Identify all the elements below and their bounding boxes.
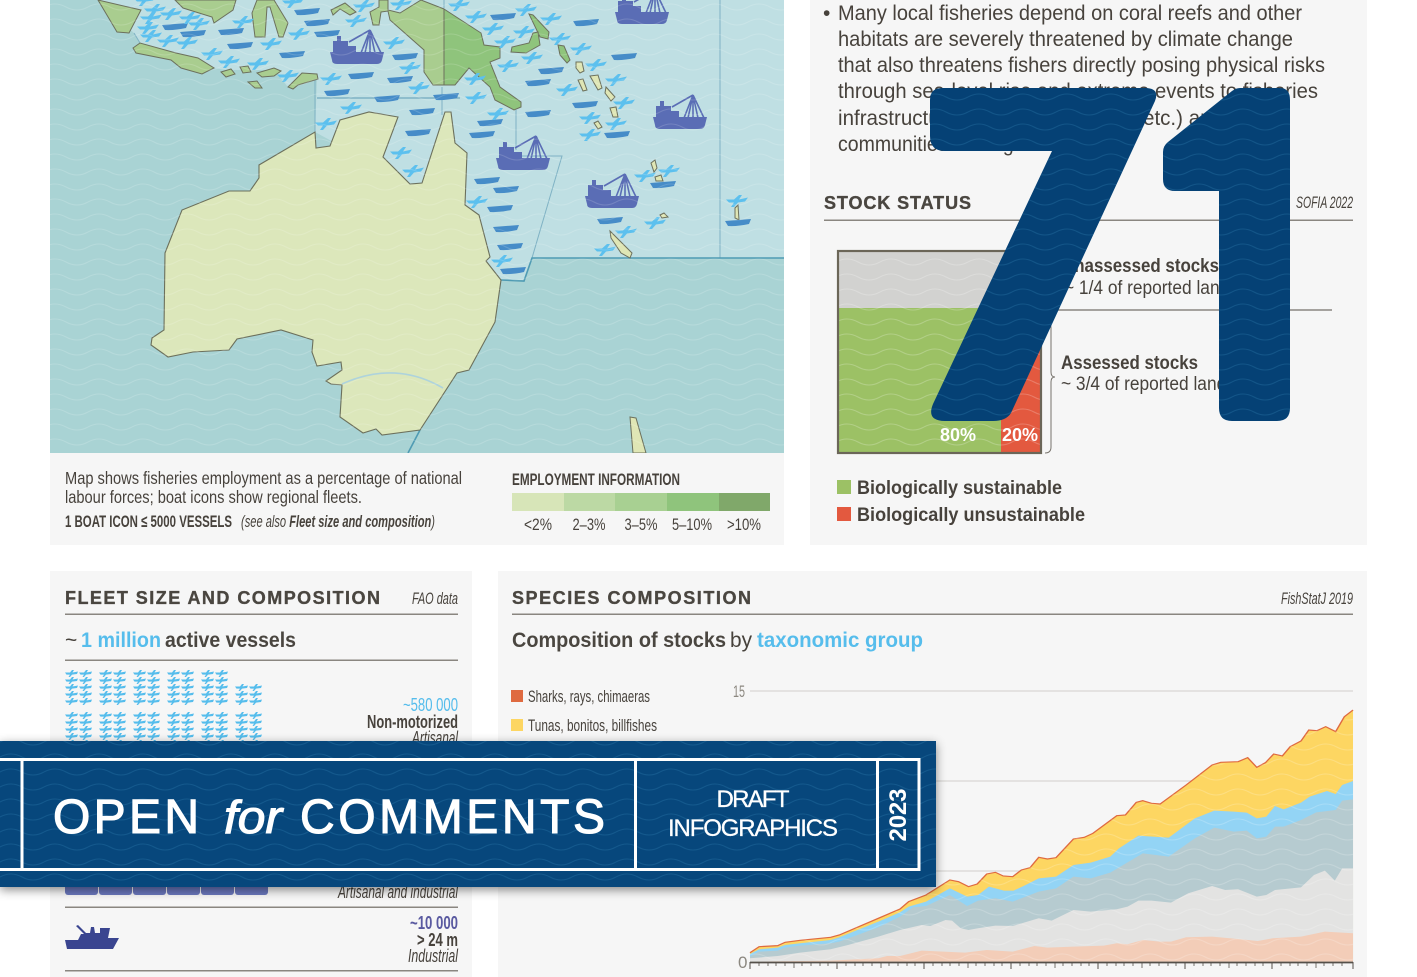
artisanal and industrial label: Artisanal and industrial (337, 882, 459, 902)
bullet text: that also threatens fishers directly posing physical risks (838, 54, 1325, 77)
stock labels: Unassessed stocks (1062, 256, 1219, 277)
subheading: composition: Composition of stocks (512, 629, 726, 652)
employment legend: 2–3% (572, 515, 606, 534)
banner title: for (224, 791, 284, 843)
caption text: Map shows fisheries employment as a percentage of national (65, 468, 462, 488)
stock legend: Biologically sustainable (857, 478, 1062, 499)
y axis labels: 15 (733, 682, 745, 701)
bullet text: • (823, 2, 830, 25)
non-motorized label: ~580 000 (403, 695, 458, 715)
employment legend (512, 470, 770, 534)
species legend (511, 687, 657, 735)
panel: fleet size and composition (50, 571, 472, 977)
EEZ light zone (98, 0, 784, 281)
large fleet icons (330, 0, 707, 208)
bullet text: infrastructure (harbours, vessels, etc.) and (838, 107, 1223, 130)
heading: species (512, 588, 1353, 615)
heading: fleet: FLEET SIZE AND COMPOSITION (65, 588, 380, 608)
subheading: active vessels: ~ (65, 629, 77, 652)
bullet text: through sea-level rise and extreme events to fisheries (838, 80, 1318, 103)
Papua New Guinea and Solomon Islands (444, 9, 570, 110)
x axis labels (727, 975, 1359, 977)
heading: fleet (65, 588, 458, 615)
subheading: active vessels (65, 629, 458, 661)
stock status bar: 80% (940, 425, 976, 445)
non-motorized vessel icons (65, 670, 262, 747)
stacked areas (750, 710, 1353, 962)
banner: open for comments (0, 741, 936, 887)
banner label: draft infographics: INFOGRAPHICS (668, 815, 840, 842)
species legend: Tunas, bonitos, billfishes (528, 716, 657, 735)
area chart (727, 691, 1359, 977)
banner label: draft infographics (668, 786, 840, 842)
big number: 71 (930, 88, 1290, 421)
map wave texture (50, 0, 784, 453)
species legend: Sharks, rays, chimaeras (528, 687, 650, 706)
employment legend: 5–10% (672, 515, 712, 534)
caption text: labour forces; boat icons show regional fleets. (65, 487, 362, 507)
stock labels: ~ 3/4 of reported landings (1061, 374, 1258, 395)
panel: map caption (50, 453, 784, 545)
employment legend: >10% (727, 515, 761, 534)
non-motorized label (367, 695, 459, 748)
heading: species: FishStatJ 2019 (1281, 589, 1353, 608)
stock labels: Assessed stocks (1061, 353, 1198, 374)
employment legend: <2% (524, 515, 552, 534)
employment legend: 3–5% (624, 515, 658, 534)
stock labels: ~ 1/4 of reported landings (1064, 278, 1261, 299)
divider and ship row: > 24 m (417, 930, 458, 950)
heading: stock status: STOCK STATUS (824, 193, 971, 213)
grid lines (750, 691, 1353, 871)
stock status bar: 20% (1002, 425, 1038, 445)
icon: industrial ship (65, 925, 119, 949)
banner frame (0, 760, 919, 870)
subheading: composition: taxonomic group (757, 629, 923, 652)
river (342, 373, 443, 388)
caption text: (see also Fleet size and composition) (241, 512, 435, 531)
non-motorized label: Non-motorized (367, 712, 458, 732)
stock legend (837, 478, 1085, 526)
divider and ship row: Industrial (408, 946, 459, 966)
maritime boundary lines (134, 0, 784, 453)
non-motorized label: Artisanal (411, 728, 459, 748)
stock status bar (838, 251, 1041, 453)
panel: species composition (498, 571, 1367, 977)
panel: right column (810, 0, 1367, 545)
y axis labels (733, 682, 747, 972)
subheading: active vessels: active vessels (165, 629, 296, 652)
heading: fleet: FAO data (412, 589, 458, 608)
stock legend: Biologically unsustainable (857, 505, 1085, 526)
divider and ship row (65, 906, 459, 972)
small fleet icons (134, 0, 751, 274)
subheading: composition (512, 629, 923, 652)
banner title: OPEN (53, 791, 199, 844)
motorized vessel icons (65, 880, 268, 895)
bullet text: communities more generally. (838, 133, 1086, 156)
caption text (65, 468, 462, 531)
subheading: active vessels: 1 million (81, 629, 161, 652)
banner title (53, 791, 605, 844)
Indonesia islands (98, 0, 444, 89)
panel: map (50, 0, 784, 453)
bullet text (823, 2, 1325, 156)
Pacific islands (576, 62, 739, 453)
y axis labels: 0 (738, 953, 747, 972)
bullet text: Many local fisheries depend on coral reefs and other (838, 2, 1302, 25)
caption text: 1 BOAT ICON ≤ 5000 VESSELS (65, 512, 232, 531)
heading: stock status: SOFIA 2022 (1296, 193, 1353, 212)
divider and ship row: ~10 000 (410, 913, 458, 933)
employment legend: EMPLOYMENT INFORMATION (512, 470, 680, 489)
bullet text: habitats are severely threatened by climate change (838, 28, 1293, 51)
Australia (151, 112, 501, 435)
heading: stock status (824, 193, 1353, 221)
stock labels (1045, 256, 1332, 453)
heading: species: SPECIES COMPOSITION (512, 588, 751, 608)
banner label: draft infographics: DRAFT (716, 786, 792, 813)
banner title: COMMENTS (300, 791, 605, 844)
banner label: year: 2023 (885, 788, 912, 842)
x axis (750, 962, 1353, 969)
subheading: composition: by (730, 629, 752, 652)
